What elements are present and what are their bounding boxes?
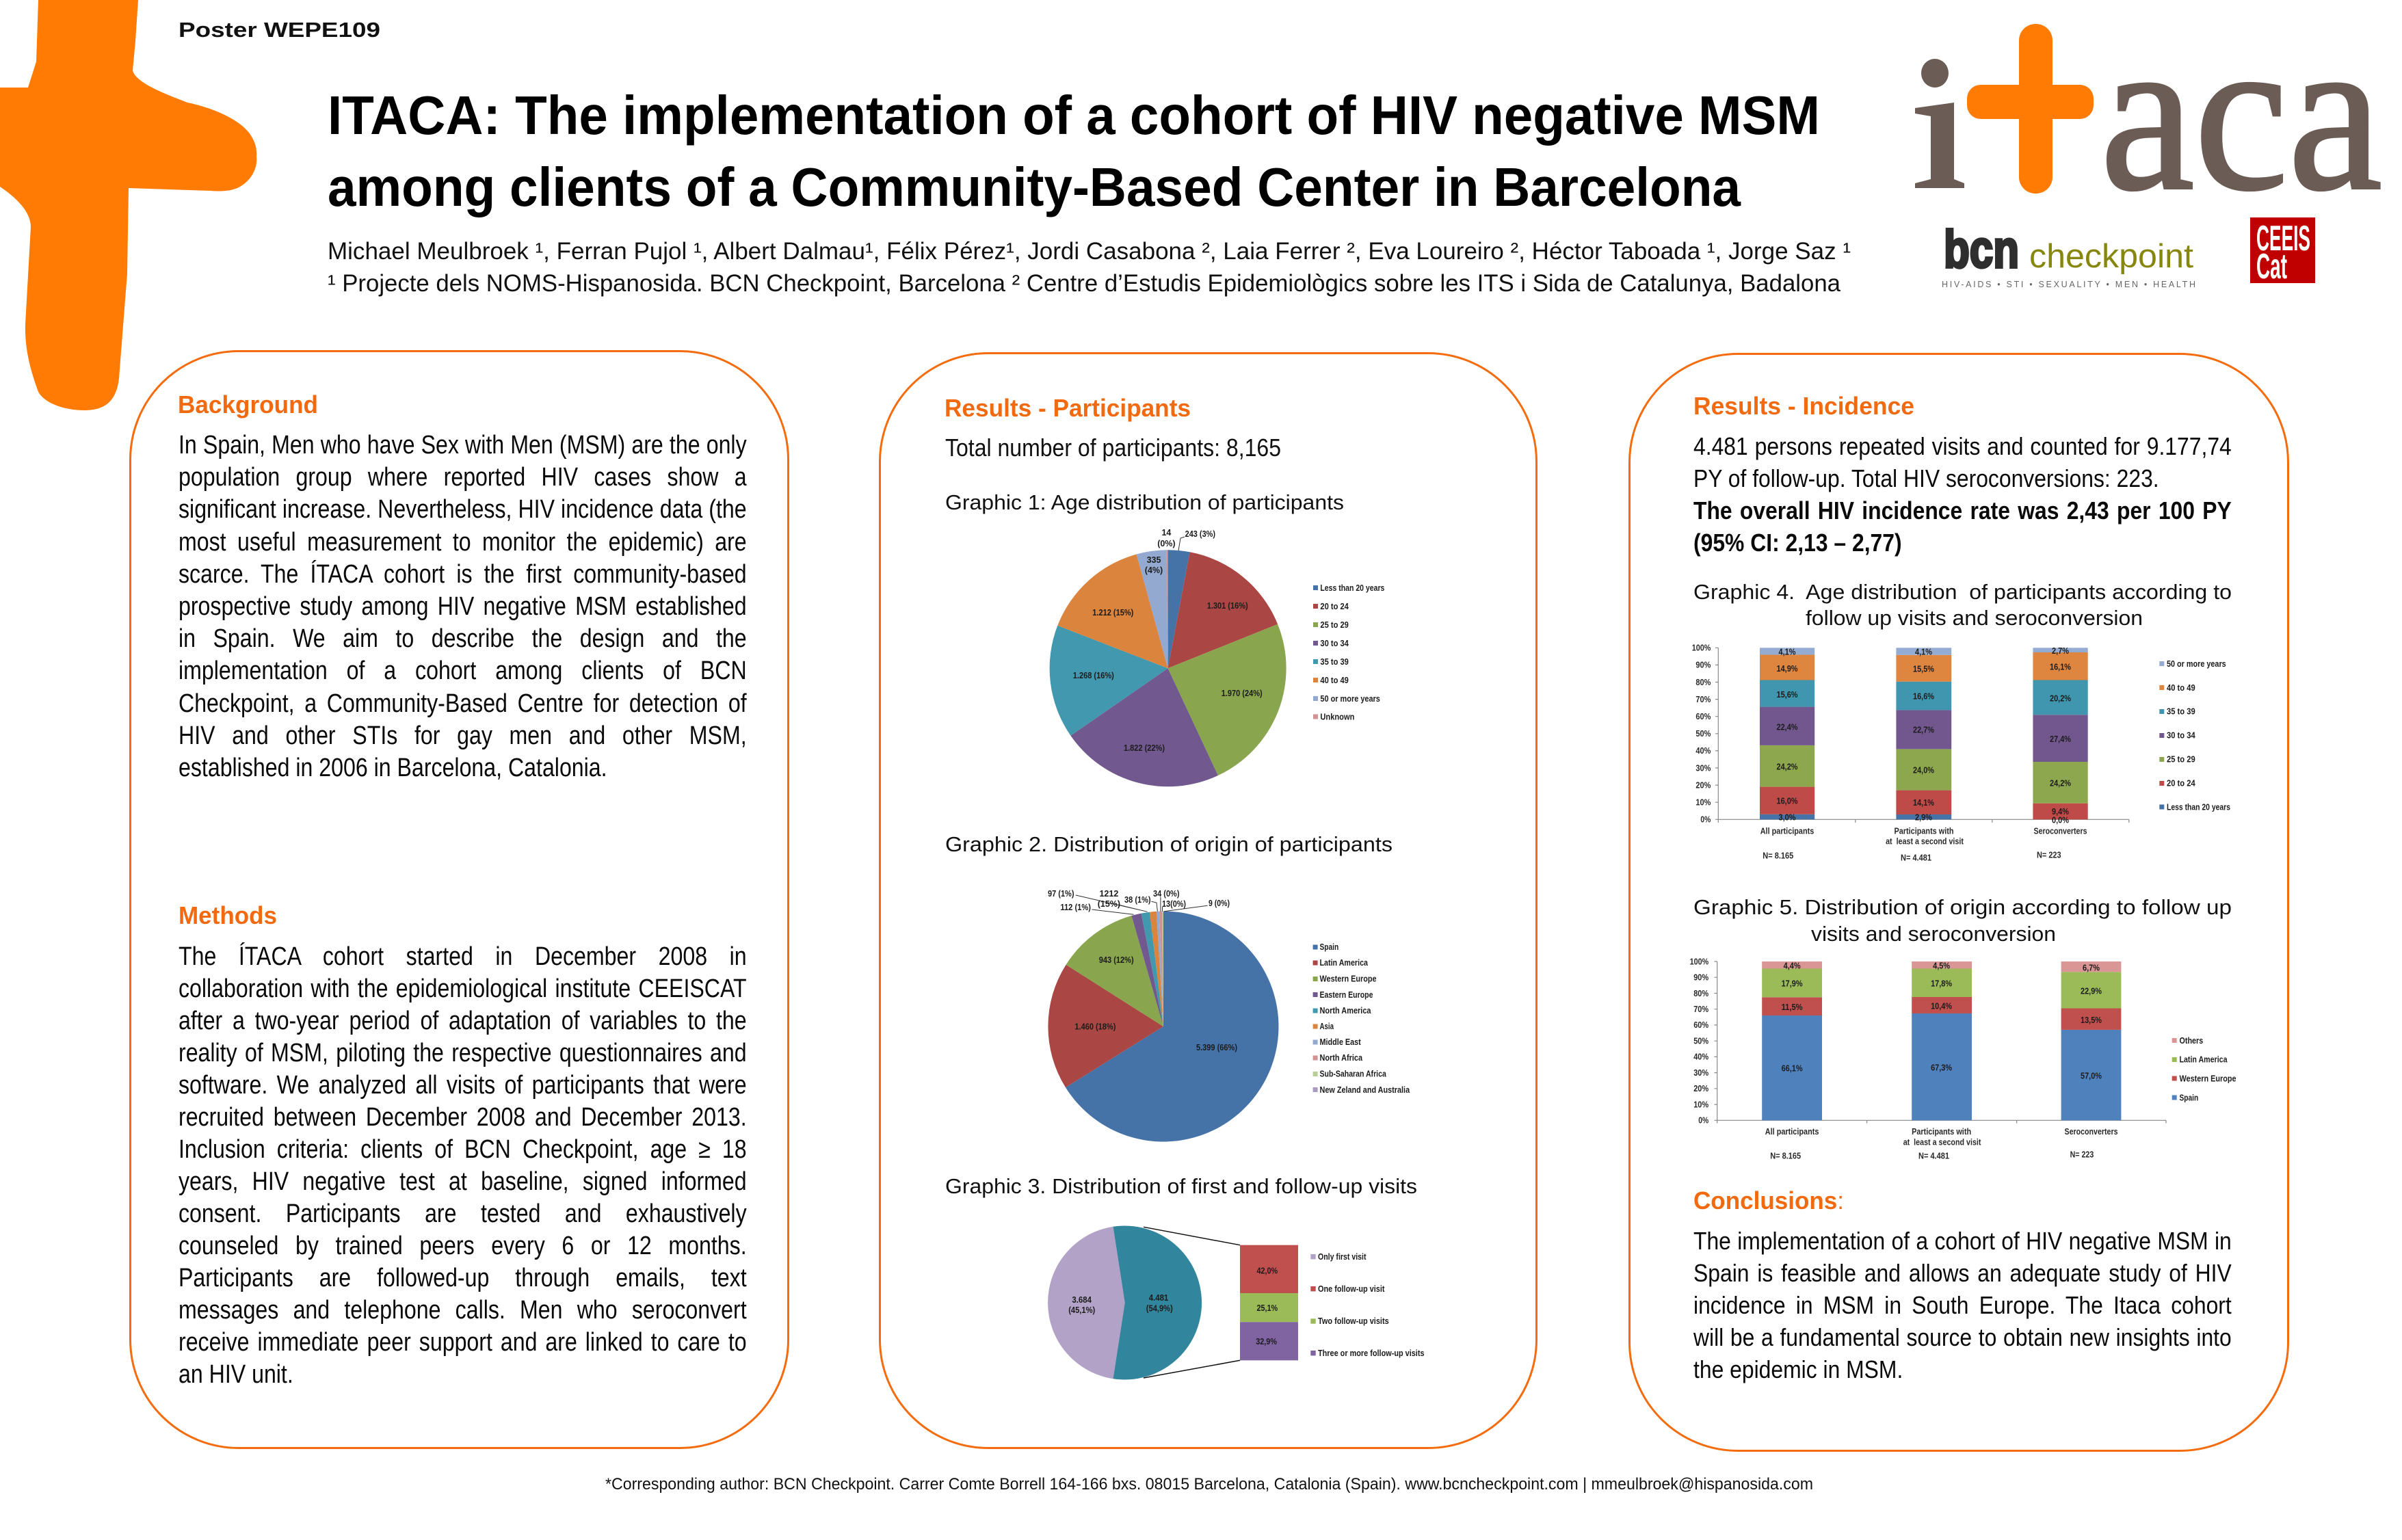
logo: bcn checkpoint: bcn xyxy=(1944,220,2019,279)
heading: Graphic 5: Graphic 5. Distribution of origin according to follow up xyxy=(1693,895,2232,919)
stacked bar chart: age by follow-up: 15,5% xyxy=(1913,665,1934,674)
stacked bar chart: origin by follow-up: 90% xyxy=(1693,972,1708,982)
panel: results incidence and conclusions xyxy=(1628,353,2289,1452)
text: methods: consent. Participants are tested and exhaustively xyxy=(179,1199,747,1228)
stacked bar chart: origin by follow-up: 40% xyxy=(1693,1052,1708,1062)
stacked bar chart: age by follow-up: 16,1% xyxy=(2050,663,2071,672)
text: background: population group where reported HIV cases show a xyxy=(179,463,747,492)
logo: CEEIS Cat xyxy=(2250,217,2315,287)
pie chart: origin: 112 (1%) xyxy=(1060,903,1091,912)
stacked bar chart: age by follow-up: 27,4% xyxy=(2050,734,2071,744)
stacked bar chart: age by follow-up: 20% xyxy=(1695,780,1711,790)
stacked bar chart: age by follow-up: N= 4.481 xyxy=(1901,853,1931,862)
stacked bar chart: origin by follow-up: 10,4% xyxy=(1931,1002,1952,1011)
legend: origin: North Africa xyxy=(1320,1053,1363,1063)
pie chart: age distribution: (0%) xyxy=(1157,539,1176,548)
legend: age by follow-up: 30 to 34 xyxy=(2167,731,2195,741)
text: methods: Participants are followed-up through emails, text xyxy=(179,1264,747,1292)
text: conclusions xyxy=(1693,1227,2232,1383)
stacked bar chart: origin by follow-up: 57,0% xyxy=(2081,1072,2102,1081)
text: methods: The ÍTACA cohort started in December 2008 in xyxy=(179,942,747,971)
logo: bcn checkpoint xyxy=(1942,220,2195,289)
stacked bar chart: age by follow-up: N= 8.165 xyxy=(1763,851,1793,861)
text: methods: counseled by trained peers every 6 or 12 months. xyxy=(179,1232,747,1260)
stacked bar chart: age by follow-up: 4,1% xyxy=(1915,648,1932,657)
legend: origin: Spain xyxy=(1320,942,1338,952)
text: incidence results: PY of follow-up. Total HIV seroconversions: 223. xyxy=(1693,464,2159,492)
pie chart: origin: 943 (12%) xyxy=(1099,955,1134,965)
text: conclusions: The implementation of a cohort of HIV negative MSM in xyxy=(1693,1227,2232,1255)
pie-of-bar chart: visits: 32,9% xyxy=(1256,1337,1277,1346)
heading: Graphic 4: follow up visits and seroconversion xyxy=(1806,606,2143,630)
stacked bar chart: age by follow-up: 0,0% xyxy=(2052,816,2069,825)
pie chart: age distribution: 1.970 (24%) xyxy=(1222,689,1263,698)
legend: origin: North America xyxy=(1320,1006,1371,1015)
stacked bar chart: origin by follow-up: Seroconverters xyxy=(2064,1127,2118,1137)
legend: age distribution: 40 to 49 xyxy=(1320,676,1349,685)
pie chart: age distribution: 1.268 (16%) xyxy=(1073,671,1114,680)
text: conclusions: Spain is feasible and allows an adequate study of HIV xyxy=(1693,1259,2232,1287)
pie chart: origin: 34 (0%) xyxy=(1153,889,1179,899)
stacked bar chart: origin by follow-up: N= 8.165 xyxy=(1770,1151,1801,1160)
text: methods: collaboration with the epidemiological institute CEEISCAT xyxy=(179,974,747,1003)
stacked bar chart: origin by follow-up: N= 223 xyxy=(2070,1150,2094,1160)
text: total participants: Total number of participants: 8,165 xyxy=(945,434,1281,462)
text: methods: recruited between December 2008 and December 2013. xyxy=(179,1103,747,1132)
legend: origin: New Zeland and Australia xyxy=(1320,1085,1410,1095)
stacked bar chart: age by follow-up: 60% xyxy=(1695,712,1711,721)
stacked bar chart: age by follow-up: 24,0% xyxy=(1913,766,1934,775)
text: methods: receive immediate peer support and are linked to care to xyxy=(179,1328,747,1357)
stacked bar chart: age by follow-up: 0% xyxy=(1700,815,1711,825)
stacked bar chart: age by follow-up: 16,0% xyxy=(1777,796,1797,806)
stacked bar chart: age by follow-up: 24,2% xyxy=(1777,762,1797,771)
stacked bar chart: age by follow-up: 3,0% xyxy=(1778,812,1796,822)
legend: age distribution: 20 to 24 xyxy=(1320,602,1349,611)
logo: itaca xyxy=(1915,0,2382,237)
stacked bar chart: origin by follow-up: 30% xyxy=(1693,1068,1708,1078)
text: background: significant increase. Nevertheless, HIV incidence data (the xyxy=(179,495,747,524)
legend: age by follow-up xyxy=(2159,659,2230,812)
stacked bar chart: age by follow-up: 10% xyxy=(1695,797,1711,807)
legend: origin by follow-up xyxy=(2172,1036,2236,1102)
title xyxy=(328,85,1820,217)
legend: origin: Eastern Europe xyxy=(1320,990,1373,1000)
heading: Conclusions: Conclusions: xyxy=(1693,1186,1844,1214)
text: background: in Spain. We aim to describe the design and the xyxy=(179,624,747,653)
authors: Michael Meulbroek ¹, Ferran Pujol ¹, Albert Dalmau¹, Félix Pérez¹, Jordi Casabona ², Laia Ferrer ², Eva Loureiro ², Héctor Taboada ¹, Jorge Saz ¹ xyxy=(328,238,1851,265)
title: among clients of a Community-Based Center in Barcelona xyxy=(328,157,1741,217)
stacked bar chart: origin by follow-up: 11,5% xyxy=(1782,1003,1803,1012)
stacked bar chart: origin by follow-up: 0% xyxy=(1698,1116,1708,1126)
text: background: prospective study among HIV negative MSM established xyxy=(179,592,747,621)
affiliations: ¹ Projecte dels NOMS-Hispanosida. BCN Checkpoint, Barcelona ² Centre d’Estudis Epidemiològics sobre les ITS i Sida de Catalunya, Badalona xyxy=(328,270,1841,297)
legend: origin: Sub-Saharan Africa xyxy=(1320,1070,1387,1079)
text: methods: an HIV unit. xyxy=(179,1360,293,1389)
heading: Graphic 5 xyxy=(1693,895,2232,946)
stacked bar chart: origin by follow-up: at least a second visit xyxy=(1903,1137,1981,1147)
legend: visits: One follow-up visit xyxy=(1318,1284,1385,1294)
stacked bar chart: age by follow-up: at least a second visit xyxy=(1886,836,1964,846)
poster number: Poster WEPE109 xyxy=(179,18,380,42)
stacked bar chart: origin by follow-up: 17,9% xyxy=(1782,979,1803,989)
stacked bar chart: age by follow-up: 2,7% xyxy=(2052,646,2069,656)
text: methods: Inclusion criteria: clients of BCN Checkpoint, age ≥ 18 xyxy=(179,1135,747,1164)
stacked bar chart: origin by follow-up: 4,4% xyxy=(1784,961,1801,970)
footer: corresponding author: *Corresponding author: BCN Checkpoint. Carrer Comte Borrell 164-166 bxs. 08015 Barcelona, Catalonia (Spain). www.bcncheckpoint.com | mmeulbroek@hispanosida.com xyxy=(605,1475,1813,1493)
pie-of-bar chart: visits: 4.481 xyxy=(1149,1293,1168,1303)
legend: visits: Two follow-up visits xyxy=(1318,1316,1389,1326)
pie-of-bar chart: visits: 25,1% xyxy=(1256,1303,1278,1313)
legend: visits xyxy=(1310,1252,1425,1358)
legend: age by follow-up: 20 to 24 xyxy=(2167,779,2195,788)
panel: results participants xyxy=(879,352,1537,1449)
pie chart: age distribution: 243 (3%) xyxy=(1185,529,1215,539)
legend: origin: Latin America xyxy=(1320,958,1369,968)
panel: background and methods xyxy=(129,350,789,1449)
stacked bar chart: age by follow-up: 24,2% xyxy=(2050,779,2071,788)
stacked bar chart: age by follow-up: 40% xyxy=(1695,746,1711,756)
heading: Graphic 4 xyxy=(1693,580,2232,630)
stacked bar chart: age by follow-up: 14,9% xyxy=(1777,664,1797,674)
pie chart: age distribution: 1.212 (15%) xyxy=(1092,608,1133,618)
stacked bar chart: origin by follow-up: N= 4.481 xyxy=(1918,1151,1949,1160)
logo: CEEIS Cat: CEEIS xyxy=(2256,219,2310,258)
legend: age distribution: Less than 20 years xyxy=(1320,583,1384,593)
stacked bar chart: age by follow-up: 14,1% xyxy=(1913,798,1934,808)
stacked bar chart: age by follow-up: 90% xyxy=(1695,661,1711,670)
legend: origin by follow-up: Western Europe xyxy=(2179,1074,2236,1083)
legend: origin: Middle East xyxy=(1320,1037,1362,1047)
stacked bar chart: age by follow-up: 2,9% xyxy=(1915,812,1932,822)
legend: age distribution xyxy=(1313,583,1384,722)
stacked bar chart: origin by follow-up: 22,9% xyxy=(2081,987,2102,996)
icon: large orange cross xyxy=(0,0,256,410)
stacked bar chart: age by follow-up: 22,4% xyxy=(1777,722,1797,732)
legend: age distribution: 50 or more years xyxy=(1320,694,1380,704)
pie-of-bar chart: visits xyxy=(1048,1225,1298,1380)
stacked bar chart: origin by follow-up xyxy=(1690,957,2166,1160)
heading: Graphic 3: Graphic 3. Distribution of first and follow-up visits xyxy=(945,1174,1417,1198)
stacked bar chart: origin by follow-up: 4,5% xyxy=(1933,961,1950,970)
stacked bar chart: origin by follow-up: 10% xyxy=(1693,1100,1708,1109)
heading: Methods: Methods xyxy=(179,901,277,929)
logo: CEEIS Cat: Cat xyxy=(2256,247,2287,287)
text: methods: after a two-year period of adaptation of variables to the xyxy=(179,1007,747,1035)
pie-of-bar chart: visits: (45,1%) xyxy=(1068,1305,1095,1315)
text: background: In Spain, Men who have Sex with Men (MSM) are the only xyxy=(179,431,747,460)
stacked bar chart: age by follow-up: 4,1% xyxy=(1778,648,1796,657)
text: background: Checkpoint, a Community-Based Centre for detection of xyxy=(179,689,747,718)
legend: age distribution: 25 to 29 xyxy=(1320,620,1349,630)
stacked bar chart: origin by follow-up: 67,3% xyxy=(1931,1063,1952,1073)
legend: origin by follow-up: Others xyxy=(2179,1036,2203,1046)
text: conclusions: will be a fundamental source to obtain new insights into xyxy=(1693,1323,2232,1351)
text: background: implementation of a cohort among clients of BCN xyxy=(179,656,747,685)
pie-of-bar chart: visits: 42,0% xyxy=(1256,1266,1278,1276)
stacked bar chart: origin by follow-up: 100% xyxy=(1690,957,1708,966)
legend: age by follow-up: 50 or more years xyxy=(2167,659,2226,669)
logo: bcn checkpoint: HIV-AIDS • STI • SEXUALITY • MEN • HEALTH xyxy=(1942,280,2195,289)
text: methods: years, HIV negative test at baseline, signed informed xyxy=(179,1167,747,1196)
stacked bar chart: age by follow-up: Seroconverters xyxy=(2034,826,2087,836)
heading: Graphic 2: Graphic 2. Distribution of origin of participants xyxy=(945,832,1393,856)
text: methods: reality of MSM, piloting the respective questionnaires and xyxy=(179,1039,747,1067)
pie chart: origin: 13(0%) xyxy=(1162,899,1186,909)
stacked bar chart: origin by follow-up: 17,8% xyxy=(1931,979,1952,989)
text: incidence results: The overall HIV incidence rate was 2,43 per 100 PY xyxy=(1693,496,2232,525)
pie chart: origin: (15%) xyxy=(1098,899,1120,909)
stacked bar chart: age by follow-up: 70% xyxy=(1695,695,1711,704)
text: methods: software. We analyzed all visits of participants that were xyxy=(179,1071,747,1100)
stacked bar chart: origin by follow-up: 80% xyxy=(1693,989,1708,998)
stacked bar chart: origin by follow-up: 13,5% xyxy=(2081,1015,2102,1025)
legend: visits: Only first visit xyxy=(1318,1252,1367,1262)
pie chart: origin: 97 (1%) xyxy=(1048,889,1074,899)
legend: origin: Western Europe xyxy=(1320,974,1377,983)
legend: origin by follow-up: Latin America xyxy=(2179,1055,2228,1065)
text: incidence results xyxy=(1693,432,2232,557)
stacked bar chart: age by follow-up: 50% xyxy=(1695,729,1711,739)
stacked bar chart: age by follow-up: 15,6% xyxy=(1777,690,1797,700)
pie-of-bar chart: visits: 3.684 xyxy=(1072,1295,1092,1305)
pie chart: origin: 1212 xyxy=(1099,889,1118,899)
text: background xyxy=(179,431,747,782)
heading: Background: Background xyxy=(178,390,318,419)
legend: age by follow-up: Less than 20 years xyxy=(2167,802,2230,812)
text: background: HIV and other STIs for gay men and other MSM, xyxy=(179,721,747,750)
stacked bar chart: age by follow-up xyxy=(1692,643,2129,862)
stacked bar chart: age by follow-up: 22,7% xyxy=(1913,726,1934,735)
heading: Graphic 4: Graphic 4. Age distribution of participants according to xyxy=(1693,580,2232,604)
legend: age distribution: 35 to 39 xyxy=(1320,657,1349,667)
stacked bar chart: origin by follow-up: 6,7% xyxy=(2083,963,2100,972)
text: incidence results: 4.481 persons repeated visits and counted for 9.177,74 xyxy=(1693,432,2232,460)
legend: age distribution: 30 to 34 xyxy=(1320,639,1349,648)
text: background: scarce. The ÍTACA cohort is the first community-based xyxy=(179,560,747,589)
pie-of-bar chart: visits: (54,9%) xyxy=(1146,1303,1173,1313)
title: ITACA: The implementation of a cohort of HIV negative MSM xyxy=(328,85,1820,146)
stacked bar chart: age by follow-up: 80% xyxy=(1695,678,1711,687)
stacked bar chart: origin by follow-up: 20% xyxy=(1693,1084,1708,1093)
pie chart: origin: 38 (1%) xyxy=(1124,895,1151,905)
heading: Results - Incidence: Results - Incidence xyxy=(1693,392,1914,420)
stacked bar chart: origin by follow-up: All participants xyxy=(1765,1127,1819,1137)
stacked bar chart: age by follow-up: 9,4% xyxy=(2052,807,2069,817)
stacked bar chart: age by follow-up: 16,6% xyxy=(1913,692,1934,702)
text: background: most useful measurement to monitor the epidemic) are xyxy=(179,528,747,557)
text: background: established in 2006 in Barcelona, Catalonia. xyxy=(179,754,607,782)
stacked bar chart: age by follow-up: 30% xyxy=(1695,763,1711,773)
heading: Graphic 1: Graphic 1: Age distribution of participants xyxy=(945,490,1344,514)
legend: age by follow-up: 35 to 39 xyxy=(2167,707,2195,717)
pie chart: age distribution: 14 xyxy=(1161,528,1171,537)
stacked bar chart: origin by follow-up: Participants with xyxy=(1912,1127,1971,1137)
pie chart: origin: 9 (0%) xyxy=(1209,899,1230,908)
stacked bar chart: age by follow-up: 100% xyxy=(1692,643,1711,653)
legend: visits: Three or more follow-up visits xyxy=(1318,1349,1425,1358)
text: methods xyxy=(179,942,747,1389)
legend: age distribution: Unknown xyxy=(1320,713,1354,722)
pie chart: origin: 1.460 (18%) xyxy=(1074,1022,1116,1031)
stacked bar chart: origin by follow-up: 66,1% xyxy=(1782,1064,1803,1074)
pie chart: age distribution: 1.822 (22%) xyxy=(1124,743,1165,753)
text: incidence results: (95% CI: 2,13 – 2,77) xyxy=(1693,529,1902,557)
text: conclusions: the epidemic in MSM. xyxy=(1693,1355,1903,1383)
stacked bar chart: origin by follow-up: 50% xyxy=(1693,1037,1708,1046)
pie chart: age distribution: 335 xyxy=(1147,555,1161,565)
stacked bar chart: origin by follow-up: 60% xyxy=(1693,1020,1708,1030)
heading: Results - Participants: Results - Participants xyxy=(945,394,1191,422)
text: conclusions: incidence in MSM in South Europe. The Itaca cohort xyxy=(1693,1291,2232,1319)
legend: age by follow-up: 25 to 29 xyxy=(2167,755,2195,765)
logo: bcn checkpoint: checkpoint xyxy=(2029,238,2193,275)
stacked bar chart: age by follow-up: All participants xyxy=(1760,826,1814,836)
legend: origin by follow-up: Spain xyxy=(2179,1093,2198,1102)
legend: origin: Asia xyxy=(1320,1022,1334,1031)
stacked bar chart: age by follow-up: N= 223 xyxy=(2037,850,2061,860)
pie chart: age distribution: (4%) xyxy=(1145,566,1163,575)
stacked bar chart: origin by follow-up: 70% xyxy=(1693,1005,1708,1014)
stacked bar chart: age by follow-up: Participants with xyxy=(1895,826,1953,836)
legend: origin xyxy=(1313,942,1410,1095)
pie chart: age distribution: 1.301 (16%) xyxy=(1207,601,1248,611)
pie chart: origin xyxy=(1048,889,1278,1141)
text: methods: messages and telephone calls. Men who seroconvert xyxy=(179,1296,747,1325)
heading: Graphic 5: visits and seroconversion xyxy=(1811,922,2056,946)
pie chart: age distribution xyxy=(1050,528,1286,786)
pie chart: origin: 5.399 (66%) xyxy=(1196,1043,1237,1052)
stacked bar chart: age by follow-up: 20,2% xyxy=(2050,693,2071,703)
legend: age by follow-up: 40 to 49 xyxy=(2167,683,2195,693)
